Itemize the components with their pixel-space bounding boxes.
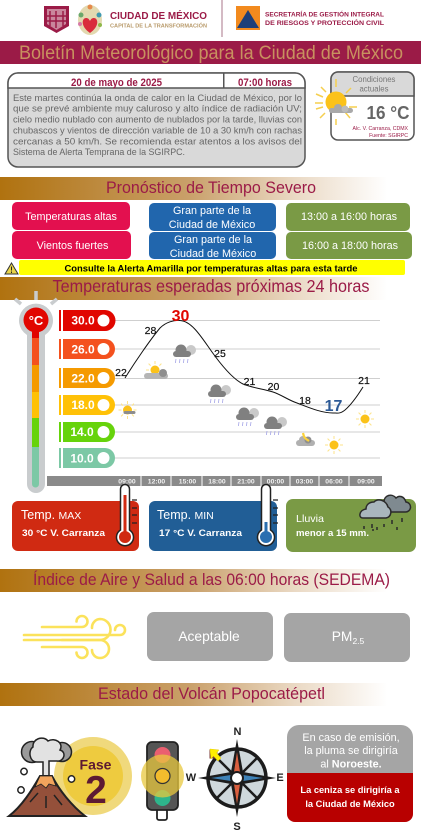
panel: severe weather table — [12, 202, 412, 260]
icon: traffic light — [141, 742, 184, 820]
temperature curve — [125, 320, 363, 413]
air status: acceptable: Aceptable — [178, 629, 240, 644]
panel: current conditions: 16 °C — [366, 103, 410, 123]
weather icons — [118, 344, 374, 454]
pill 14: 14.0 — [70, 425, 94, 439]
bulletin body: cielo medio nublado con aumento de nublados por la tarde, lluvias con — [13, 114, 302, 124]
pill 22 — [59, 368, 115, 388]
phenomenon: strong winds: Vientos fuertes — [37, 240, 109, 252]
phenomenon: high temperatures — [12, 202, 130, 230]
time axis: 15:00 — [179, 479, 196, 486]
icon: rain clouds — [360, 495, 411, 531]
icon: compass: N — [234, 726, 242, 738]
icon: sun 06:00 — [325, 436, 343, 454]
pill 22: 22.0 — [71, 372, 95, 386]
icon: thermometer scale: °C — [29, 313, 44, 328]
heading: expected temperatures — [0, 276, 421, 300]
arrow: plume direction — [210, 749, 221, 761]
pill 18: 18.0 — [71, 398, 95, 412]
pill 26: 26.0 — [71, 342, 95, 356]
bulletin body: chubascos y vientos de dirección variable de 10 a 30 km/h con rachas — [13, 126, 302, 136]
icon: partly cloudy 12:00 — [144, 361, 168, 379]
bulletin body: Este martes continúa la onda de calor en la Ciudad de México, por lo — [13, 93, 302, 103]
card: min temperature: Temp. MIN — [157, 508, 214, 522]
time 2 — [286, 232, 412, 259]
title banner: Boletín Meteorológico para la Ciudad de México — [19, 43, 403, 64]
panel: current conditions: actuales — [359, 84, 389, 94]
pill 10: 10.0 — [70, 452, 94, 466]
heading: expected temperatures: Temperaturas esperadas próximas 24 horas — [52, 276, 370, 296]
time axis: 18:00 — [208, 479, 226, 486]
callout: plume and ash: la pluma se dirigiría — [304, 745, 398, 757]
logo text: Ciudad de México: CIUDAD DE MÉXICO — [110, 9, 207, 22]
time axis — [47, 476, 382, 486]
card: rain: Lluvia — [296, 513, 324, 525]
callout: plume and ash: La ceniza se dirigiría a — [300, 785, 400, 795]
logo: civil protection — [236, 6, 260, 30]
icon: cold thermometer — [258, 484, 278, 546]
area 1 — [149, 203, 276, 231]
icon: moon cloud 03:00 — [296, 433, 315, 446]
time: 07:00 horas — [238, 77, 292, 89]
bulletin body — [13, 93, 302, 157]
pill 10 — [59, 448, 115, 468]
heading: volcano — [0, 683, 421, 706]
callout: plume and ash — [287, 725, 413, 822]
phenomenon: high temperatures: Temperaturas altas — [25, 211, 118, 223]
pill 30 — [59, 310, 116, 331]
time axis: 09:00 — [118, 479, 136, 486]
logo: shield — [44, 6, 69, 33]
area 2: Gran parte de la — [174, 234, 252, 246]
time axis: 00:00 — [267, 479, 284, 486]
icon: hot thermometer — [116, 484, 137, 546]
icon: wind — [24, 616, 125, 658]
heading: air quality: Índice de Aire y Salud a las 06:00 horas (SEDEMA) — [33, 570, 390, 589]
curve labels: 21 — [244, 376, 255, 388]
card: rain: menor a 15 mm. — [296, 528, 369, 539]
time axis: 21:00 — [237, 479, 255, 486]
icon: phase 2 badge: 2 — [85, 769, 107, 812]
callout: plume and ash: la Ciudad de México — [305, 799, 395, 809]
curve labels — [115, 308, 370, 415]
icon: sun 09:00 — [356, 410, 374, 428]
date: 20 de mayo de 2025 — [71, 77, 162, 89]
curve labels: 18 — [299, 395, 311, 407]
icon: volcano — [9, 738, 85, 816]
icon: sun and cloud — [315, 79, 357, 125]
pill 30: 30.0 — [71, 314, 95, 328]
card: max temperature: 30 °C V. Carranza — [22, 528, 106, 539]
icon: rain 00:00 — [264, 416, 287, 435]
time axis: 09:00 — [357, 479, 375, 486]
card: rain — [286, 495, 416, 552]
area 1: Gran parte de la — [173, 205, 251, 217]
icon: thermometer scale — [15, 291, 57, 493]
panel: current conditions — [315, 72, 414, 140]
card: max temperature: Temp. MAX — [21, 508, 81, 522]
card: min temperature: 17 °C V. Carranza — [159, 528, 243, 539]
pill 14 — [59, 422, 115, 442]
time 1: 13:00 a 16:00 horas — [301, 211, 398, 223]
logo text: Ciudad de México — [110, 9, 207, 30]
icon: warning — [5, 263, 18, 274]
heading: severe weather — [0, 177, 421, 200]
bulletin body: Sistema de Alerta Temprana de la SGIRPC. — [13, 147, 185, 157]
bulletin body: cercanas a 50 km/h. Se recomienda estar atentos a los avisos del — [13, 136, 302, 146]
curve labels: 22 — [115, 367, 127, 379]
curve labels: 25 — [214, 348, 226, 360]
header logos — [44, 0, 384, 37]
card: min temperature — [149, 484, 278, 551]
alert bar — [5, 260, 405, 275]
icon: rain 15:00 — [173, 344, 196, 363]
time 1 — [286, 203, 410, 231]
logo text: Ciudad de México: CAPITAL DE LA TRANSFORMACIÓN — [110, 22, 207, 30]
time axis: 12:00 — [148, 479, 165, 486]
area 2: Ciudad de México — [170, 248, 256, 260]
heading: air quality — [0, 569, 421, 592]
icon: rain 21:00 — [236, 408, 259, 426]
panel: bulletin text — [8, 73, 305, 167]
icon: compass: E — [276, 772, 284, 784]
time axis: 06:00 — [325, 479, 343, 486]
logo text: SGIRPC: SECRETARÍA DE GESTIÓN INTEGRAL — [265, 10, 384, 18]
air pollutant: PM2.5: 2.5 — [352, 636, 365, 646]
time axis: 03:00 — [296, 479, 313, 486]
air status: acceptable — [147, 612, 273, 661]
air pollutant: PM2.5 — [284, 613, 410, 662]
heading: severe weather: Pronóstico de Tiempo Severo — [106, 179, 316, 197]
curve labels: 17 — [325, 398, 342, 415]
time 2: 16:00 a 18:00 horas — [302, 240, 399, 252]
bulletin body: que se prevé ambiente muy caluroso y alto índice de radiación UV; — [13, 104, 302, 114]
chart: temperature forecast — [15, 291, 382, 493]
phenomenon: strong winds — [12, 231, 131, 259]
pill 18 — [59, 395, 115, 415]
callout: plume and ash: En caso de emisión, — [302, 732, 400, 744]
area 2 — [149, 232, 276, 260]
icon: compass: W — [186, 772, 197, 784]
icon: compass: S — [233, 821, 241, 833]
panel: current conditions: Fuente: SGIRPC — [369, 133, 408, 139]
area 1: Ciudad de México — [169, 219, 255, 231]
panel: current conditions: Condiciones — [353, 75, 396, 84]
curve labels: 28 — [145, 325, 156, 337]
icon: phase 2 badge: Fase — [80, 756, 112, 772]
card: max temperature — [12, 484, 139, 551]
panel: current conditions: Alc. V. Carranza, CDMX — [353, 126, 409, 132]
scale pills — [59, 310, 116, 468]
alert bar: Consulte la Alerta Amarilla por temperaturas altas para esta tarde — [64, 264, 358, 274]
callout: plume and ash: al Noroeste. — [320, 758, 382, 770]
icon: sun with cloud 09:00 — [118, 401, 136, 419]
logo text: SGIRPC: DE RIESGOS Y PROTECCIÓN CIVIL — [265, 18, 384, 27]
curve labels: 20 — [268, 381, 279, 393]
icon: compass — [186, 726, 284, 833]
logo: heart — [78, 4, 102, 35]
logo text: SGIRPC — [265, 10, 384, 27]
icon: phase 2 badge — [54, 737, 132, 815]
curve labels: 21 — [358, 375, 370, 387]
curve labels: 30 — [172, 308, 190, 325]
icon: rain 18:00 — [208, 384, 231, 403]
air pollutant: PM2.5: PM — [332, 629, 352, 644]
heading: volcano: Estado del Volcán Popocatépetl — [98, 685, 325, 703]
pill 26 — [59, 339, 115, 359]
